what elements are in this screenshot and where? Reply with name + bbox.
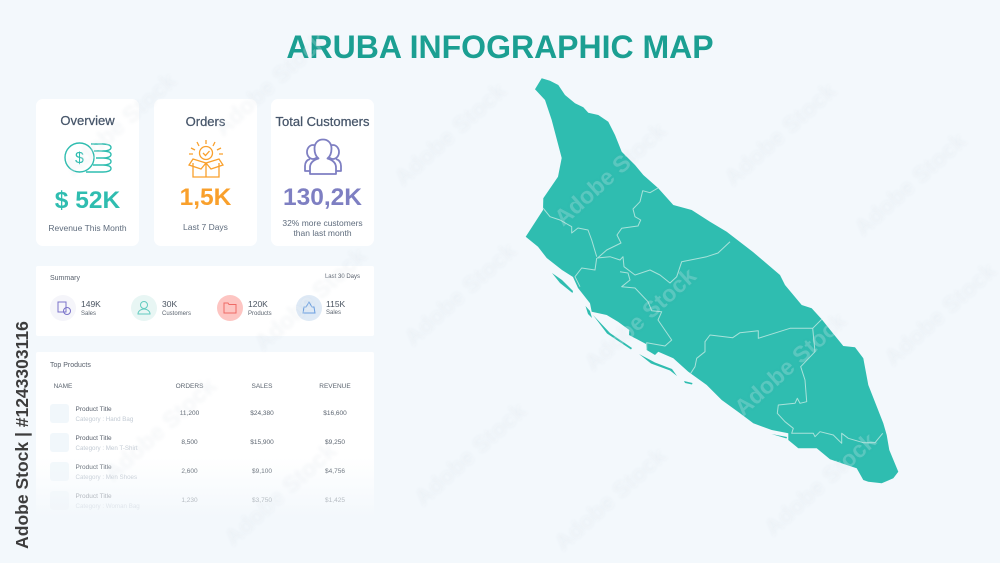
table row 2: 8,500 bbox=[181, 439, 198, 446]
panel: summary bbox=[36, 266, 374, 336]
watermark layer: Adobe Stock bbox=[219, 437, 341, 551]
stat value and label: Sales bbox=[81, 311, 96, 317]
stock id label: Adobe Stock | #1243303116 bbox=[12, 321, 32, 549]
table row 3: Product Title bbox=[76, 464, 112, 471]
table row 4: Product Title bbox=[76, 493, 112, 500]
panel: total customers bbox=[271, 99, 374, 246]
table header: REVENUE bbox=[319, 383, 351, 390]
stat value and label: 120K bbox=[248, 299, 268, 309]
title: ARUBA INFOGRAPHIC MAP bbox=[286, 29, 714, 65]
table row 3: $9,100 bbox=[252, 468, 272, 475]
table row 2 bbox=[50, 433, 345, 452]
stat value and label: 30K bbox=[162, 299, 177, 309]
watermark layer: Adobe Stock bbox=[719, 77, 841, 191]
icon: coins bbox=[64, 142, 112, 173]
watermark layer: Adobe Stock bbox=[59, 67, 181, 181]
table row 4 bbox=[76, 493, 345, 510]
panel: top products bbox=[36, 352, 374, 522]
heading: orders: Orders bbox=[186, 114, 225, 129]
watermark layer: Adobe Stock bbox=[99, 372, 221, 486]
table row 1: Category : Hand Bag bbox=[76, 416, 133, 423]
heading: total customers: Total Customers bbox=[276, 114, 369, 129]
table row 2: $9,250 bbox=[325, 439, 345, 446]
summary period: Last 30 Days bbox=[325, 274, 360, 280]
table header: SALES bbox=[252, 383, 272, 390]
stat value and label: Products bbox=[248, 311, 272, 317]
table row 3: $4,756 bbox=[325, 468, 345, 475]
stat: sales 2 bbox=[296, 295, 345, 321]
watermark layer: Adobe Stock bbox=[389, 77, 511, 191]
icon: sales 2 bbox=[296, 295, 322, 321]
table header: NAME bbox=[54, 383, 72, 390]
stat: products bbox=[217, 295, 272, 321]
table row 2: Category : Men T-Shirt bbox=[76, 445, 138, 452]
table header: ORDERS bbox=[176, 383, 203, 390]
caption: customers bbox=[282, 218, 363, 238]
watermark layer: Adobe Stock bbox=[549, 117, 671, 231]
watermark layer: Adobe Stock bbox=[249, 242, 371, 356]
stat value and label bbox=[81, 299, 101, 317]
stat: sales bbox=[50, 295, 101, 321]
watermark layer: Adobe Stock bbox=[209, 27, 331, 141]
caption: customers: than last month bbox=[293, 228, 352, 238]
table row 4: 1,230 bbox=[181, 497, 198, 504]
table row 3: Category : Men Shoes bbox=[76, 474, 137, 481]
table row 3 bbox=[50, 462, 345, 481]
table row 2: $15,900 bbox=[250, 439, 274, 446]
table row 4: $3,750 bbox=[252, 497, 272, 504]
table row 1: $16,600 bbox=[323, 410, 347, 417]
watermark layer: Adobe Stock bbox=[579, 262, 701, 376]
watermark layer: Adobe Stock bbox=[729, 307, 851, 421]
caption: orders: Last 7 Days bbox=[183, 222, 228, 232]
stat value and label: Customers bbox=[162, 311, 191, 317]
icon: customers bbox=[131, 295, 157, 321]
summary heading: Summary bbox=[50, 275, 80, 282]
table row 4: $1,425 bbox=[325, 497, 345, 504]
watermark layer: Adobe Stock bbox=[879, 257, 1000, 371]
heading: overview: Overview bbox=[60, 113, 115, 128]
offshore islets bbox=[552, 273, 787, 438]
watermark layer: Adobe Stock bbox=[399, 237, 521, 351]
icon: products bbox=[217, 295, 243, 321]
table row 2: Product Title bbox=[76, 435, 112, 442]
caption: customers: 32% more customers bbox=[282, 218, 363, 228]
region borders bbox=[543, 188, 883, 443]
value: orders: 1,5K bbox=[180, 184, 231, 211]
watermark layer: Adobe Stock bbox=[849, 127, 971, 241]
stat value and label bbox=[326, 299, 345, 316]
watermark layer: Adobe Stock bbox=[549, 442, 671, 556]
table row 4: Category : Woman Bag bbox=[76, 503, 140, 510]
icon: people bbox=[304, 138, 342, 175]
caption: revenue: Revenue This Month bbox=[48, 223, 127, 233]
stat value and label: Sales bbox=[326, 310, 341, 316]
value: revenue: $ 52K bbox=[55, 187, 120, 214]
icon: sales bbox=[50, 295, 76, 321]
table header bbox=[54, 383, 351, 390]
panel: overview bbox=[36, 99, 139, 246]
watermark layer: Adobe Stock bbox=[759, 427, 881, 541]
map landmass bbox=[526, 78, 898, 483]
stat value and label bbox=[162, 299, 191, 317]
panel: orders bbox=[154, 99, 257, 246]
stat value and label: 149K bbox=[81, 299, 101, 309]
stat value and label bbox=[248, 299, 272, 317]
icon: box bbox=[188, 140, 224, 178]
stat: customers bbox=[131, 295, 191, 321]
value: customers: 130,2K bbox=[283, 184, 362, 211]
table row 1: $24,380 bbox=[250, 410, 274, 417]
watermark layer: Adobe Stock bbox=[409, 397, 531, 511]
top products heading: Top Products bbox=[50, 362, 91, 369]
table row 1: Product Title bbox=[76, 406, 112, 413]
stat value and label: 115K bbox=[326, 299, 345, 309]
table row 3: 2,600 bbox=[181, 468, 198, 475]
table row 1: 11,200 bbox=[180, 410, 199, 417]
icon: coins: $ bbox=[75, 150, 84, 167]
table row 1 bbox=[50, 404, 347, 423]
